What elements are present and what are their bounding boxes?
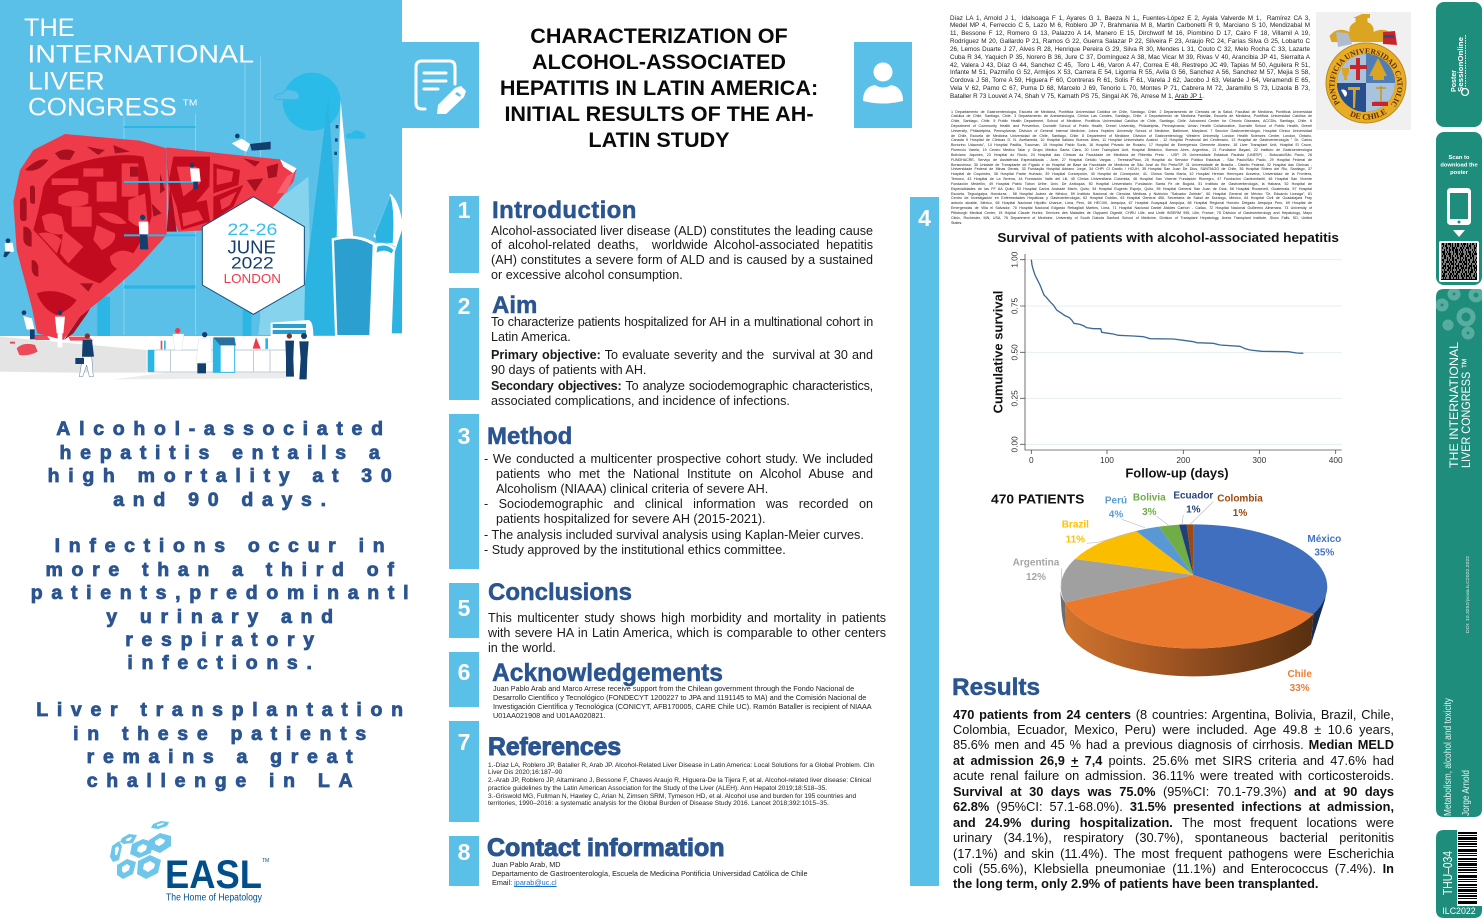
text: author affiliations: Especialidades de las FF AA Quito, 53 Hospital Carlos Andrade Marín, Quito, 54 Hospital Eugenio Espejo, Quito, 55 Hospital General San Juan de Dios, 56 Hospital Roosevelt, Guatemala, 57 Hospital: [951, 187, 1312, 191]
text: method: patients who met the National Institute on Alcohol Abuse and: [496, 467, 873, 481]
text: method: patients hospitalized for severe AH (2015-2021).: [496, 512, 766, 526]
key message: infections: infections.: [127, 652, 321, 674]
text: author affiliations: Chile, Santiago, Chile. 5 Public Health Department, School of Medicine, Pontificia Universidad Católica de Chile, Santiago, Chile. Advanced Center for Chronic Diseases, ACCDis, Santiago, Chile. 6: [951, 119, 1312, 123]
key message: mortality: and 90 days.: [113, 488, 335, 510]
text: authors: Bataller R 73 Louvet A 74, Shah V 75, Kamath PS 75, Singal AK 76, Arrese M 1, Arab JP 1.: [950, 93, 1204, 100]
pie side walls: [1060, 587, 1327, 676]
text: author affiliations: Católica de Chile, Santiago, Chile. 3 Departamento de Anestesiología, Clínica Las Condes, Santiago, Chile. 4 Departamento de Medicina Familiar, Escuela de Medicina, Pontificia Universidad Católica de: [951, 114, 1312, 118]
illustration: date hexagon: 22-26: [227, 220, 277, 239]
title: LATIN STUDY: [588, 127, 730, 152]
heading: contact information: Contact information: [487, 834, 724, 862]
number tile 2: [449, 288, 479, 400]
text: results: urinary (34.1%), respiratory (30.7%), spontaneous bacterial peritonitis: [953, 830, 1394, 845]
scan instruction text: download the: [1440, 162, 1478, 168]
sidebar: congress and abstract details: [1436, 289, 1482, 817]
y axis tick labels: 0.00: [1010, 436, 1020, 452]
label: Perú: 4%: [1109, 510, 1123, 521]
logo: EASL: EASL: [165, 853, 262, 897]
text: results: Colombia, Ecuador, Mexico, Peru) were included. Age 49.8 ± 10.6 years,: [953, 722, 1394, 737]
text: authors: Medel MP 4, Ferreccio C 5, Lazo M 6, Roblero JP 7, Brahmania M 8, Martin Carbonetti R 9, Marciano S 10, Mendizabal M: [950, 22, 1310, 29]
illustration: date hexagon: JUNE: [228, 237, 276, 257]
text: method: Alcoholism (NIAAA) clinical criteria of severe AH.: [496, 482, 768, 496]
label: Brazil: 11%: [1066, 534, 1085, 545]
survival curve: [1031, 260, 1303, 353]
key message: infections: more than a third of: [45, 558, 403, 580]
text: author affiliations: [951, 110, 1312, 225]
icon tile: person: [854, 42, 912, 128]
text: references: 1.-Díaz LA, Roblero JP, Bataller R, Arab JP. Alcohol-Related Liver Disease in Latin America: Local Solutions for a Global Problem. Clin: [488, 762, 875, 768]
logo: EASL: TM: [262, 858, 269, 864]
text: author affiliations: 1 Departamento de Gastroenterología, Escuela de Medicina, Pontificia Universidad Católica de Chile, Santiago, Chile. 2 Departamento de Ciencias de la Salud, Facultad de Medicina, Pontificia Universidad: [951, 110, 1312, 114]
text: author affiliations: Universidade Federal de Minas Gerais, 33 Fundação Hospital Adriano Jorge, 34 CHP/ Ci Danilo / HCUH, 35 Hospital San Juan De Dios, SANTIAGO de Chile, 36 Hospital Sótero del Rio, Santiago, 37: [951, 167, 1312, 171]
illustration: liver shelves: [124, 181, 196, 236]
illustration: date hexagon: LONDON: [224, 272, 281, 286]
heading: introduction: Introduction: [492, 197, 637, 224]
text: author affiliations: Florencio Varela, 19 Centro Medico Talar y Grupo Médico Santa Clara, 20 Liver Transplant Unit, Hospital Británico, Buenos Aires, Argentina., 21 Fundación Bayani, 22 Instituto de Gastroenterología: [951, 148, 1312, 152]
heading: references: References: [488, 734, 621, 761]
text: author affiliations: Centro de Investigación en Enfermedades Hepáticas y Gastroenterología, 62 Hospital Dublán, 63 Hospital General 450, Secretaría de Salud de Durango, México, 64 Hospital Civil de Guadalajara Fray: [951, 196, 1312, 200]
label: Colombia: 1%: [1233, 508, 1247, 519]
section 7: references: [449, 721, 875, 822]
heading: congress name: CONGRESS: [28, 95, 177, 122]
text: aim: To characterize patients hospitalized for AH in a multinational cohort in: [491, 314, 873, 328]
pie slices: [1061, 524, 1327, 648]
key message: infections: Infections occur in: [55, 535, 393, 557]
text: acknowledgements: U01AA021908 and U01AA020821.: [493, 711, 605, 720]
text: authors: Infante M 51, Pazmiño G 52, Armijos X 53, Carrera E 54, Ligorria R 55, Avila G 56, Sanchez A 56, Sanchez M 57, Mejia S 58,: [950, 69, 1310, 76]
text: references: Liver Dis 2020;16:187–90: [488, 769, 562, 776]
key message: infections: y urinary and: [106, 606, 342, 628]
text: aim: [491, 314, 873, 344]
number tile 4: [910, 197, 939, 886]
text: references: 3.-Griswold MG, Fullman N, Hawley C, Arian N, Zimsen SRM, Tymeson HD, et al. Alcohol use and burden for 195 countries and: [488, 793, 856, 800]
text: author affiliations: antonio alcalde, México, 65 Hospital Nacional Hipólito Unanue, Lima, Perú, 66 HECXIII, Arequipa, 67 Hospital Guayaquil Arequipa, 68 Hospital Regional Honorio Delgado Arequipa Peru, 69 Hospital de: [951, 201, 1312, 205]
number tile 8: [449, 836, 479, 886]
y axis tick labels: [1010, 251, 1020, 452]
y axis tick labels: 0.75: [1010, 298, 1020, 314]
text: method: - Sociodemographic and clinical information was recorded on: [484, 497, 873, 511]
text: author affiliations: Clinic, Rochester, MN, USA, 76 Department of Medicine, University of South Dakota Sanford School of Medicine, Division of Transplant Hepatology, Avera Transplant Institute, Sioux Falls, SD, United: [951, 216, 1312, 220]
chart: Kaplan-Meier survival curve: [991, 230, 1343, 481]
number tile 3: [449, 414, 479, 569]
text: results: and 24.9% during hospitalization. The most frequent locations were: [953, 815, 1394, 830]
text: author affiliations: FUNDHACRE- Serviço de Assistência Especializada - Acre, 27 Hospital Getúlio Vargas - Teresina/Piauí, 28 Hospital do Servidor Público Estadual - São Paulo/São Paulo, 29 Hospital Federal de: [951, 158, 1312, 162]
text: results: coli (55.6%), Klebsiella pneumoniae (11.1%) and Enterococcus (7.4%). In: [953, 861, 1394, 876]
label: Colombia: [1217, 494, 1263, 519]
key messages: [31, 418, 417, 792]
illustration: London skyline: [258, 97, 402, 336]
title: INITIAL RESULTS OF THE AH-: [504, 101, 814, 126]
text: results: Survival at 30 days was 75.0% (95%CI: 70.1-79.3%) and at 90 days: [953, 784, 1394, 799]
x axis tick labels: [1029, 455, 1343, 465]
university crest: DE CHILE: [1350, 109, 1386, 120]
heading: method: Method: [487, 423, 572, 450]
label: Colombia: Colombia: [1217, 494, 1263, 505]
illustration: date hexagon: [202, 197, 304, 314]
icon tile: document and pencil: [402, 42, 479, 128]
logo: EASL: The Home of Hepatology: [166, 892, 262, 904]
text: conclusions: in the world.: [488, 640, 556, 654]
illustration: date hexagon: 2022: [231, 254, 274, 273]
section 3: method: [449, 414, 873, 569]
QR code: [1439, 241, 1479, 282]
congress name: THE INTERNATIONAL: [1447, 342, 1461, 468]
label: México: [1307, 534, 1341, 559]
text: author affiliations: Escuela, Tegucigalpa, Honduras , 58 Hospital Juárez de México, 59 Instituto Nacional de Ciencias Médicas y Nutrición "Salvador Zubirán", 60 Hospital General de México "Dr. Eduardo Liceaga", 61: [951, 192, 1312, 196]
text: introduction: [491, 224, 873, 282]
scan instruction text: [1440, 155, 1478, 176]
text: method: - Study approved by the institutional ethics committee.: [484, 543, 786, 557]
text: acknowledgements: Investigación Científica y Tecnológica (CONICYT, AFB170005, CARE Chile UC). Ramón Bataller is recipient of NIAAA: [493, 702, 872, 711]
section 2: aim: [449, 288, 873, 408]
text: authors: Cuba R 34, Yaquich P 35, Norero B 36, Jure C 37, Domínguez A 38, Mac Vicar M 39, Rivas V 40, Arancibia JP 41, Sierralta A: [950, 54, 1310, 61]
x axis tick labels: 0: [1029, 455, 1034, 465]
number tile 4: 4: [918, 205, 931, 231]
text: authors: 42, Valera J 43, Díaz G 44, Sanchez C 45, Toro L 46, Varon A 47, Correa E 48, Restrepo JC 49, Tapias M 50, Aguilera R 51,: [950, 62, 1310, 69]
heading: conclusions: Conclusions: [488, 579, 632, 606]
text: results: acute renal failure on admission. 36.11% were treated with corticosteroids.: [953, 768, 1394, 783]
text: contact information: Email: jparab@uc.cl: [492, 878, 557, 887]
DOI: DOI: 10.3252/pcwa.ILC2022.2022: [1465, 556, 1471, 633]
text: author affiliations: Emergencias de Villa el Salvador, 70 Hospital Nacional Edgardo Rebagliati Martins, Lima, 71 Hospital Nacional Daniel Alcides Carrion - Callao, 72 Hospital Nacional Guillermo Almenara. 73 University of: [951, 206, 1312, 210]
text: author affiliations: Temuco, 43 Hospital de La Serena, 44 Fundación Valle del Lili, 45 Clínica Universitaria Colombia, 46 Hospital San Vicente Fundación Rionegro, 47 Fundación Cardioinfantil, 48 Hospital San Vicente: [951, 177, 1312, 181]
number tile 3: 3: [458, 423, 470, 449]
label: Brazil: [1062, 520, 1089, 545]
text: authors: Vela V 62, Pamo C 67, Puma D 68, Marcelo J 69, Tenorio L 70, Montes P 71, Cabrera M 72, Jaramillo S 73, Lizaola B 73,: [950, 85, 1310, 92]
text: acknowledgements: [493, 684, 872, 720]
text: authors: [950, 14, 1310, 100]
sidebar: scan to download: [1436, 132, 1482, 285]
number tile 1: 1: [458, 197, 470, 223]
heading: results: Results: [952, 674, 1040, 701]
label: Chile: 33%: [1290, 683, 1310, 694]
key message: infections: patients,predominantl: [31, 582, 417, 604]
icon: down arrow: [1453, 230, 1465, 237]
poster number: THU–034: [1441, 851, 1455, 895]
number tile 2: 2: [458, 293, 470, 319]
illustration: white ground and floor shadow: [0, 336, 402, 400]
text: contact information: Juan Pablo Arab, MD: [492, 860, 561, 869]
label: Bolivia: [1133, 493, 1166, 518]
scan instruction text: poster: [1450, 170, 1469, 176]
sidebar: poster session online: [1436, 2, 1482, 127]
number tile 6: 6: [458, 659, 470, 685]
number tile 7: [449, 721, 479, 822]
chart title: Survival of patients with alcohol-associated hepatitis: [997, 230, 1339, 245]
x axis tick labels: 300: [1252, 455, 1267, 465]
key message: transplantation: in these patients: [73, 722, 375, 744]
text: authors: Rodríguez M 20, Gallardo P 21, Ramos G 22, Guerra Salazar P 22, Silveira F 23, Araujo RC 24, Farías Silva G 25, Lobarto C: [950, 38, 1310, 45]
label: Brazil: Brazil: [1062, 520, 1089, 531]
icon: sun and clouds: [275, 73, 365, 139]
text: conclusions: with severe HA in Latin America, which is comparable to other centers: [488, 626, 886, 640]
y axis tick labels: 0.50: [1010, 344, 1020, 360]
text: introduction: or excessive alcohol consumption.: [491, 268, 683, 282]
text: introduction: Alcohol-associated liver disease (ALD) constitutes the leading cause: [491, 224, 873, 238]
text: primary objective: [491, 348, 873, 376]
text: references: territories, 1990–2016: a systematic analysis for the Global Burden of Disease Study 2016. Lancet 2018;392:1015–35.: [488, 800, 829, 807]
text: references: [488, 762, 875, 807]
text: author affiliations: University, Philadelphia, Pennsylvania; Division of General Internal Medicine, Johns Hopkins University School of Medicine, Baltimore, Maryland. 7 Sección Gastroenterología, Hospital Clínico Universidad: [951, 129, 1312, 133]
heading: congress name: LIVER: [28, 68, 105, 95]
logo: EASL: [110, 821, 269, 904]
text: results: 85.6% men and 45 % had a previous diagnosis of cirrhosis. Median MELD: [953, 737, 1394, 752]
text: primary objective: Primary objective: To evaluate severity and the survival at 30 and: [491, 348, 873, 362]
sidebar: poster session online: SessionOnline: [1456, 37, 1465, 92]
key message: transplantation: Liver transplantation: [36, 699, 412, 721]
sidebar: poster number and barcode: [1436, 830, 1482, 918]
text: aim: Latin America.: [491, 330, 571, 344]
title: HEPATITIS IN LATIN AMERICA:: [500, 75, 818, 100]
decorative hexagon pattern: [1438, 290, 1481, 337]
section 8: contact information: [449, 834, 808, 887]
key message: mortality: Alcohol-associated: [56, 418, 392, 440]
x axis tick labels: 200: [1176, 455, 1191, 465]
number tile 1: [449, 196, 479, 273]
author: Jorge Arnold: [1461, 770, 1472, 816]
text: authors: 26, Lemos Duarte J 27, Alves R 28, Henrique Pereira G 29, Silva R 30, Mendes L 31, Couto C 32, Melo Rocha C 33, Lazarte: [950, 46, 1310, 53]
label: Perú: Perú: [1105, 496, 1127, 507]
key message: transplantation: [36, 699, 412, 792]
text: author affiliations: Department of Community Health and Prevention, Dornsife School of Public Health, Drexel University, Philadelphia, Pennsylvania; Urban Health Collaborative, Dornsife School of Public Health, Drexel: [951, 124, 1312, 128]
label: Ecuador: [1173, 491, 1213, 516]
text: results: (17.1%) and skin (11.4%). The most frequent pathogens were Escherichia: [953, 846, 1394, 861]
text: acknowledgements: Desarrollo Científico y Tecnológico (FONDECYT 1200227 to JPA and 1191145 to MA) and the Comisión Nacional de: [493, 693, 866, 702]
text: secondary objectives: [491, 378, 873, 408]
text: acknowledgements: Juan Pablo Arab and Marco Arrese receive support from the Chilean government through the Fondo Nacional de: [493, 684, 854, 693]
text: authors: 11, Bessone F 12, Romero G 13, Palazzo A 14, Manero E 15, Dirchwolf M 16, Piombino D 17, Cairo F 18, Villamil A 19,: [950, 30, 1310, 37]
sidebar: poster session online: Poster: [1449, 70, 1458, 92]
text: author affiliations: Canada 9 Hospital de Clínicas D. N. Avellaneda, 10 Hospital Italiano Buenos Aires, 11 Hospital Universitario Austral , 12 Hospital Provincial del Centenario, 13 Hospital de Gastroenterología " Dr. Carlos: [951, 138, 1312, 142]
text: author affiliations: Boliviano Japonés, 23 Hospital do Rocio, 24 Hospital das Clínicas da Faculdade de Medicina de Ribeirão Preto - USP, 25 Universidade Estadual Paulista (UNESP) - Botucatu/São Paulo, 26: [951, 153, 1312, 157]
text: method: [484, 452, 873, 557]
key message: mortality: hepatitis entails a: [60, 442, 388, 464]
key message: mortality: high mortality at 30: [48, 465, 400, 487]
key message: transplantation: remains a great: [87, 746, 361, 768]
title: ALCOHOL-ASSOCIATED: [532, 49, 786, 74]
illustration: laboratory bench and staff: [148, 328, 309, 379]
text: author affiliations: Bonsucesso, 30 Unidade de Transplante de Fígado e do Hospital de Base da Faculdade de Medicina de São José do Rio Preto/SP, 31 Universidade de Brasília - Distrito Federal, 32 Hospital das Clínicas -: [951, 163, 1312, 167]
text: conclusions: [488, 610, 886, 654]
text: method: - The analysis included survival analysis using Kaplan-Meier curves.: [484, 528, 864, 542]
key message: mortality: [48, 418, 400, 510]
label: Argentina: [1013, 558, 1060, 583]
illustration: scientists climbing the liver: [3, 134, 271, 377]
text: conclusions: This multicenter study shows high morbidity and mortality in patients: [488, 610, 886, 624]
title: [500, 23, 818, 152]
label: Bolivia: 3%: [1142, 507, 1157, 518]
text: results: 470 patients from 24 centers (8 countries: Argentina, Bolivia, Brazil, Chile,: [953, 706, 1394, 722]
section 6: acknowledgements: [449, 652, 872, 720]
x axis tick labels: 400: [1329, 455, 1343, 465]
text: author affiliations: de Chile, Escuela de Medicina Universidad de Chile, Santiago, Chile. 8 Department of Medicine, Division of Gastroenterology, Western University, London Health Sciences Center, London, Ontario,: [951, 134, 1312, 138]
heading: congress name: [24, 15, 254, 122]
text: author affiliations: Bonorino Udaondo", 14 Hospital Padilla, Tucuman, 15 Hospital Pablo Soria, 16 Hospital Privado de Rosario, 17 Hospital de Emergencia Clemente Alvarez, 18 Liver Transplant Unit, Hospital El Cruce,: [951, 143, 1312, 147]
label: Perú: [1105, 496, 1127, 521]
text: author affiliations: Hospital de Coquimbo, 38 Hospital Padre Hurtado, 39 Hospital Concepción, 40 Hospital de Concepción, 41. Clínica Santa María, 42 Hospital Hernán Henríquez Aravena, Universidad de la Frontera,: [951, 172, 1312, 176]
chart: patients by country pie: [991, 491, 1341, 694]
topic: Metabolism, alcohol and toxicity: [1443, 698, 1454, 816]
text: author affiliations: Pittsburgh Medical Center, 15 Hôpital Claude Huriez, Services des Maladies de l'Appareil Digestif, CHRU Lille, and Unité INSERM 995, Lille, France, 75 Division of Gastroenterology and Hepatology, Mayo: [951, 211, 1312, 215]
icon: smartphone: [1447, 188, 1471, 225]
section 5: conclusions: [449, 579, 886, 654]
key message: transplantation: challenge in LA: [87, 770, 361, 792]
x axis title: Follow-up (days): [1125, 466, 1229, 481]
heading: congress name: TM: [183, 98, 198, 107]
number tile 6: [449, 652, 479, 707]
barcode: [1458, 832, 1477, 904]
text: secondary objectives: Secondary objectives: To analyze sociodemographic characteristics,: [491, 378, 873, 392]
text: contact information: [492, 860, 808, 887]
x axis tick labels: 100: [1100, 455, 1114, 465]
text: results: at admission 26,9 + 7,4 points. 25.6% met SIRS criteria and 47.6% had: [953, 753, 1394, 768]
label: México: 35%: [1314, 548, 1334, 559]
heading: aim: Aim: [492, 292, 537, 319]
section 1: introduction: [449, 196, 873, 282]
key message: infections: [31, 535, 417, 674]
conference code: ILC2022: [1442, 906, 1476, 916]
illustration: liver: [10, 134, 297, 355]
text: contact information: Departamento de Gastroenterología, Escuela de Medicina Pontificia Universidad Católica de Chile: [492, 869, 808, 878]
y axis tick labels: 1.00: [1010, 251, 1020, 268]
title: CHARACTERIZATION OF: [530, 23, 788, 48]
text: references: 2.-Arab JP, Roblero JP, Altamirano J, Bessone F, Chaves Araujo R, Higuera-De la Tijera F, et al. Alcohol-related liver disease: Clinical: [488, 777, 871, 784]
text: introduction: (AH) constitutes a severe form of ALD and is caused by a sustained: [491, 253, 873, 267]
number tile 8: 8: [458, 839, 470, 865]
label: 470 patients: 470 PATIENTS: [991, 493, 1084, 507]
text: method: - We conducted a multicenter prospective cohort study. We included: [484, 452, 873, 466]
heading: congress name: INTERNATIONAL: [27, 41, 254, 68]
text: authors: Díaz LA 1, Arnold J 1, Idalsoaga F 1, Ayares G 1, Baeza N 1,, Fuentes-López E 2, Ayala Valverde M 1, Ramírez CA 3,: [950, 14, 1310, 22]
text: secondary objectives: associated complications, and incidence of infections.: [491, 394, 790, 408]
label: México: México: [1307, 534, 1341, 545]
panel: congress banner illustration: [0, 0, 402, 380]
label: Argentina: Argentina: [1013, 558, 1060, 569]
heading: congress name: THE: [24, 15, 75, 42]
label: Ecuador: 1%: [1186, 505, 1201, 516]
text: authors: Cordova J 58, Torre A 59, Higuera F 60, Contreras R 61, Solis F 61, Varela J 62, Jacobo J 63, Velarde J 64, Veramendi E 65,: [950, 77, 1310, 84]
number tile 5: 5: [458, 595, 470, 621]
text: results: 62.8% (95%CI: 57.1-68.0%). 31.5% presented infections at admission,: [953, 799, 1394, 814]
scan instruction text: Scan to: [1449, 155, 1470, 161]
number tile 5: [449, 583, 479, 638]
key message: infections: respiratory: [125, 629, 323, 651]
chart axes: [1020, 254, 1342, 454]
y axis tick labels: 0.25: [1010, 390, 1020, 406]
y axis title: Cumulative survival: [991, 291, 1006, 413]
text: primary objective: 90 days of patients with AH.: [491, 362, 646, 376]
text: references: practice guidelines by the Latin American Association for the Study of the Liver (ALEH). Ann Hepatol 2019;18:518–35.: [488, 785, 827, 792]
label: Ecuador: Ecuador: [1173, 491, 1213, 502]
illustration: red double-decker bus: [271, 320, 313, 336]
text: author affiliations: States.: [951, 221, 962, 225]
congress name: LIVER CONGRESS ™: [1459, 358, 1473, 468]
label: Chile: [1287, 669, 1312, 694]
label: Bolivia: Bolivia: [1133, 493, 1166, 504]
label: Chile: Chile: [1287, 669, 1312, 680]
text: introduction: of alcohol-related deaths, worldwide Alcohol-associated hepatitis: [491, 238, 873, 252]
text: results: [953, 706, 1394, 891]
congress name: [1447, 342, 1473, 468]
label: Argentina: 12%: [1026, 572, 1046, 583]
number tile 7: 7: [458, 729, 470, 755]
text: results: the long term, only 2.9% of patients have been transplanted.: [953, 876, 1318, 891]
heading: acknowledgements: Acknowledgements: [492, 660, 723, 687]
text: author affiliations: Fundación Medellín, 49 Hospital Pablo Tobon Uribe. Univ. De Antioquia, 50 Hospital Universitario Fundación Santa Fe de Bogotá, 51 Instituto de Gastroenterología, la Habana, 52 Hospital de: [951, 182, 1312, 186]
